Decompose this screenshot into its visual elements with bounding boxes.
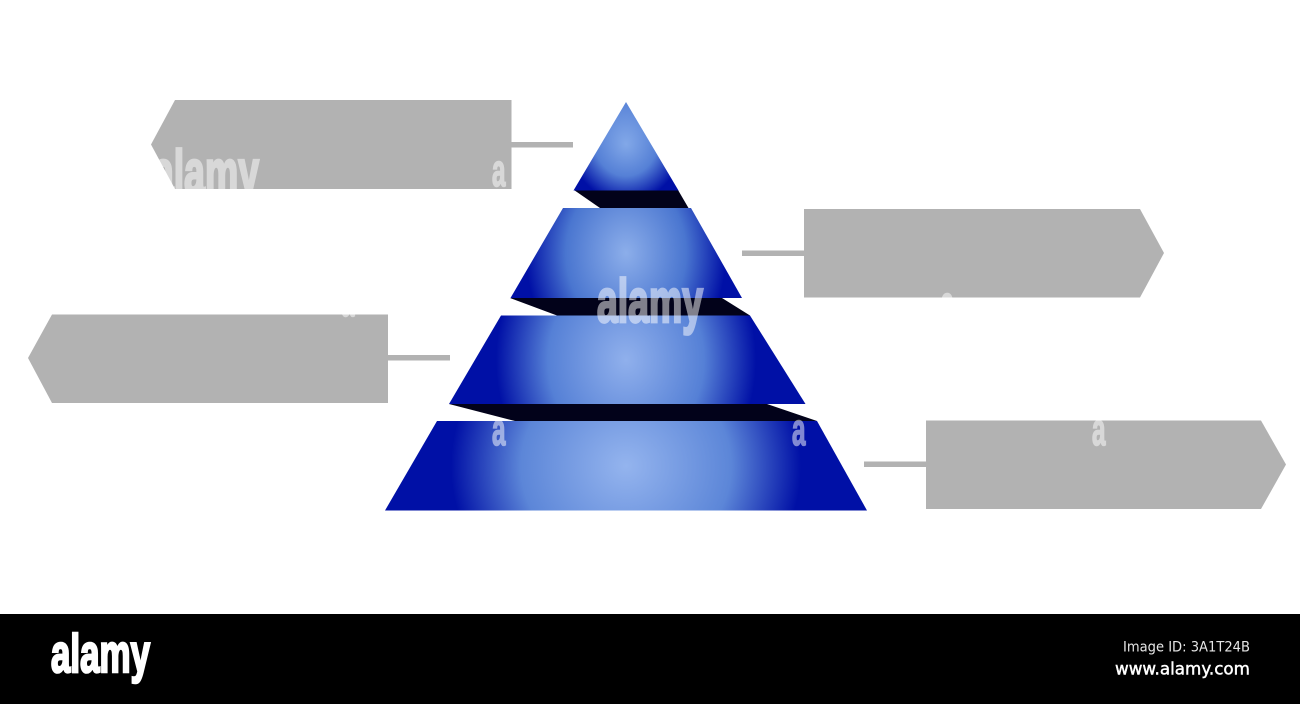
callout box: top left bbox=[151, 100, 512, 189]
callout box: lower left bbox=[28, 314, 388, 403]
pyramid shadow: gap 1 bbox=[574, 190, 688, 208]
connector: top left bbox=[511, 142, 573, 148]
callout: lower right bbox=[864, 420, 1286, 509]
pyramid shadow: gap 3 bbox=[449, 404, 817, 421]
footer bar bbox=[0, 614, 1300, 704]
pyramid tier 2 bbox=[510, 208, 742, 298]
watermark: center: alamy bbox=[597, 267, 703, 335]
footer website: www.alamy.com bbox=[1115, 660, 1250, 678]
watermark letter: lower right callout: a bbox=[1092, 404, 1106, 455]
connector: lower right bbox=[864, 462, 926, 467]
callout box: upper right bbox=[804, 209, 1164, 298]
watermark letter: lower left callout: a bbox=[341, 275, 355, 326]
pyramid tier 1 bbox=[574, 102, 678, 190]
pyramid shadow: gap 2 bbox=[510, 298, 750, 316]
pyramid tier 4 bbox=[385, 421, 867, 510]
watermark letter: pyramid left: a bbox=[492, 404, 506, 455]
callout: lower left bbox=[28, 314, 450, 403]
connector: upper right bbox=[742, 250, 804, 256]
footer image id: Image ID: 3A1T24B bbox=[1123, 640, 1250, 656]
callout: upper right bbox=[742, 209, 1164, 298]
watermark letter: pyramid right: a bbox=[792, 404, 806, 455]
watermark letter: top left callout: a bbox=[492, 145, 506, 196]
footer logo: alamy bbox=[51, 624, 150, 684]
callout box: lower right bbox=[926, 420, 1286, 509]
watermark: top left callout: alamy bbox=[153, 138, 259, 206]
watermark letter: upper right callout: a bbox=[940, 277, 955, 328]
connector: lower left bbox=[388, 355, 450, 360]
pyramid tier 3 bbox=[449, 316, 806, 404]
pyramid bbox=[385, 102, 867, 510]
callout: top left bbox=[151, 100, 573, 189]
watermark overlay bbox=[153, 138, 1106, 455]
